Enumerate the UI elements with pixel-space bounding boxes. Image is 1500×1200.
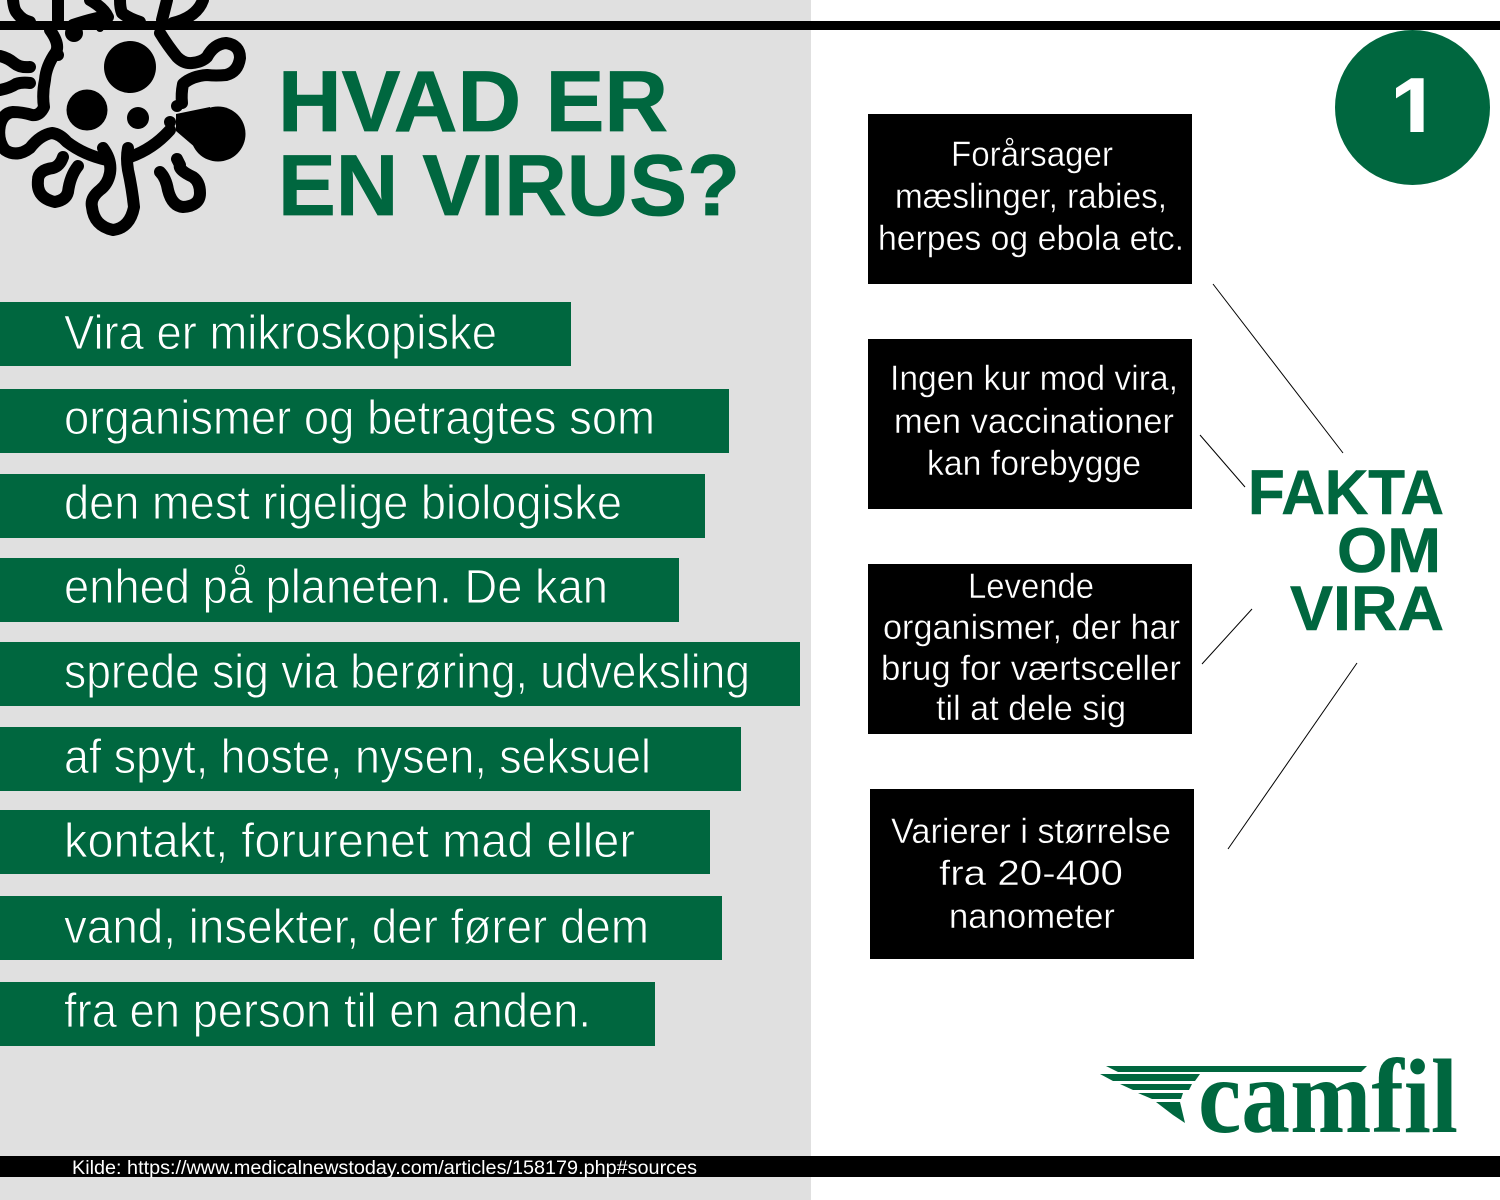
title (278, 54, 740, 234)
text block: highlighted body text: enhed på planeten. De kan (64, 561, 608, 614)
heading: fakta om vira: FAKTA (1248, 458, 1444, 528)
heading: fakta om vira: VIRA (1290, 574, 1444, 644)
logo: camfil (1100, 1038, 1458, 1155)
panel: left grey background (0, 0, 811, 1200)
bottom black bar (0, 1156, 1500, 1177)
heading: fakta om vira: OM (1337, 516, 1441, 586)
text block: highlighted body text: den mest rigelige biologiske (64, 477, 622, 530)
title: EN VIRUS? (278, 138, 740, 234)
panel: fact box 2 (868, 339, 1192, 509)
panel: fact box 3: brug for værtsceller (881, 649, 1181, 688)
logo: camfil: camfil (1198, 1038, 1458, 1155)
panel: fact box 1 (868, 114, 1192, 284)
icon: virus (0, 0, 245, 230)
connector lines (1200, 284, 1357, 849)
source text: Kilde: https://www.medicalnewstoday.com/articles/158179.php#sources (72, 1158, 697, 1179)
heading: fakta om vira (1248, 458, 1444, 644)
badge: number 1: 1 (1388, 58, 1441, 165)
panel: fact box 4: fra 20-400 (939, 854, 1123, 893)
title: HVAD ER (278, 54, 668, 150)
panel: fact box 3 (868, 564, 1192, 734)
text block: highlighted body text: vand, insekter, der fører dem (64, 901, 649, 954)
text block: highlighted body text: af spyt, hoste, nysen, seksuel (64, 731, 651, 784)
panel: fact box 3: til at dele sig (936, 689, 1126, 728)
panel: fact box 4 (870, 789, 1194, 959)
top black rule (0, 21, 1500, 30)
panel: fact box 4: Varierer i størrelse (891, 812, 1171, 851)
text block: highlighted body text: organismer og betragtes som (64, 392, 655, 445)
panel: fact box 3: organismer, der har (883, 608, 1180, 647)
text block: highlighted body text: sprede sig via berøring, udveksling (64, 646, 750, 699)
text block: highlighted body text: Vira er mikroskopiske (64, 307, 497, 360)
panel: fact box 1: Forårsager (951, 135, 1113, 174)
text block: highlighted body text: kontakt, forurenet mad eller (64, 815, 635, 868)
panel: fact box 1: herpes og ebola etc. (878, 219, 1184, 258)
panel: fact box 1: mæslinger, rabies, (895, 177, 1167, 216)
panel: fact box 2: Ingen kur mod vira, (890, 359, 1178, 398)
panel: fact box 3: Levende (968, 567, 1094, 606)
text block: highlighted body text (0, 302, 800, 1046)
text block: highlighted body text: fra en person til en anden. (64, 985, 591, 1038)
panel: fact box 2: kan forebygge (927, 444, 1141, 483)
panel: fact box 2: men vaccinationer (894, 402, 1174, 441)
panel: fact box 4: nanometer (949, 897, 1115, 936)
badge: number 1 (1335, 30, 1490, 185)
